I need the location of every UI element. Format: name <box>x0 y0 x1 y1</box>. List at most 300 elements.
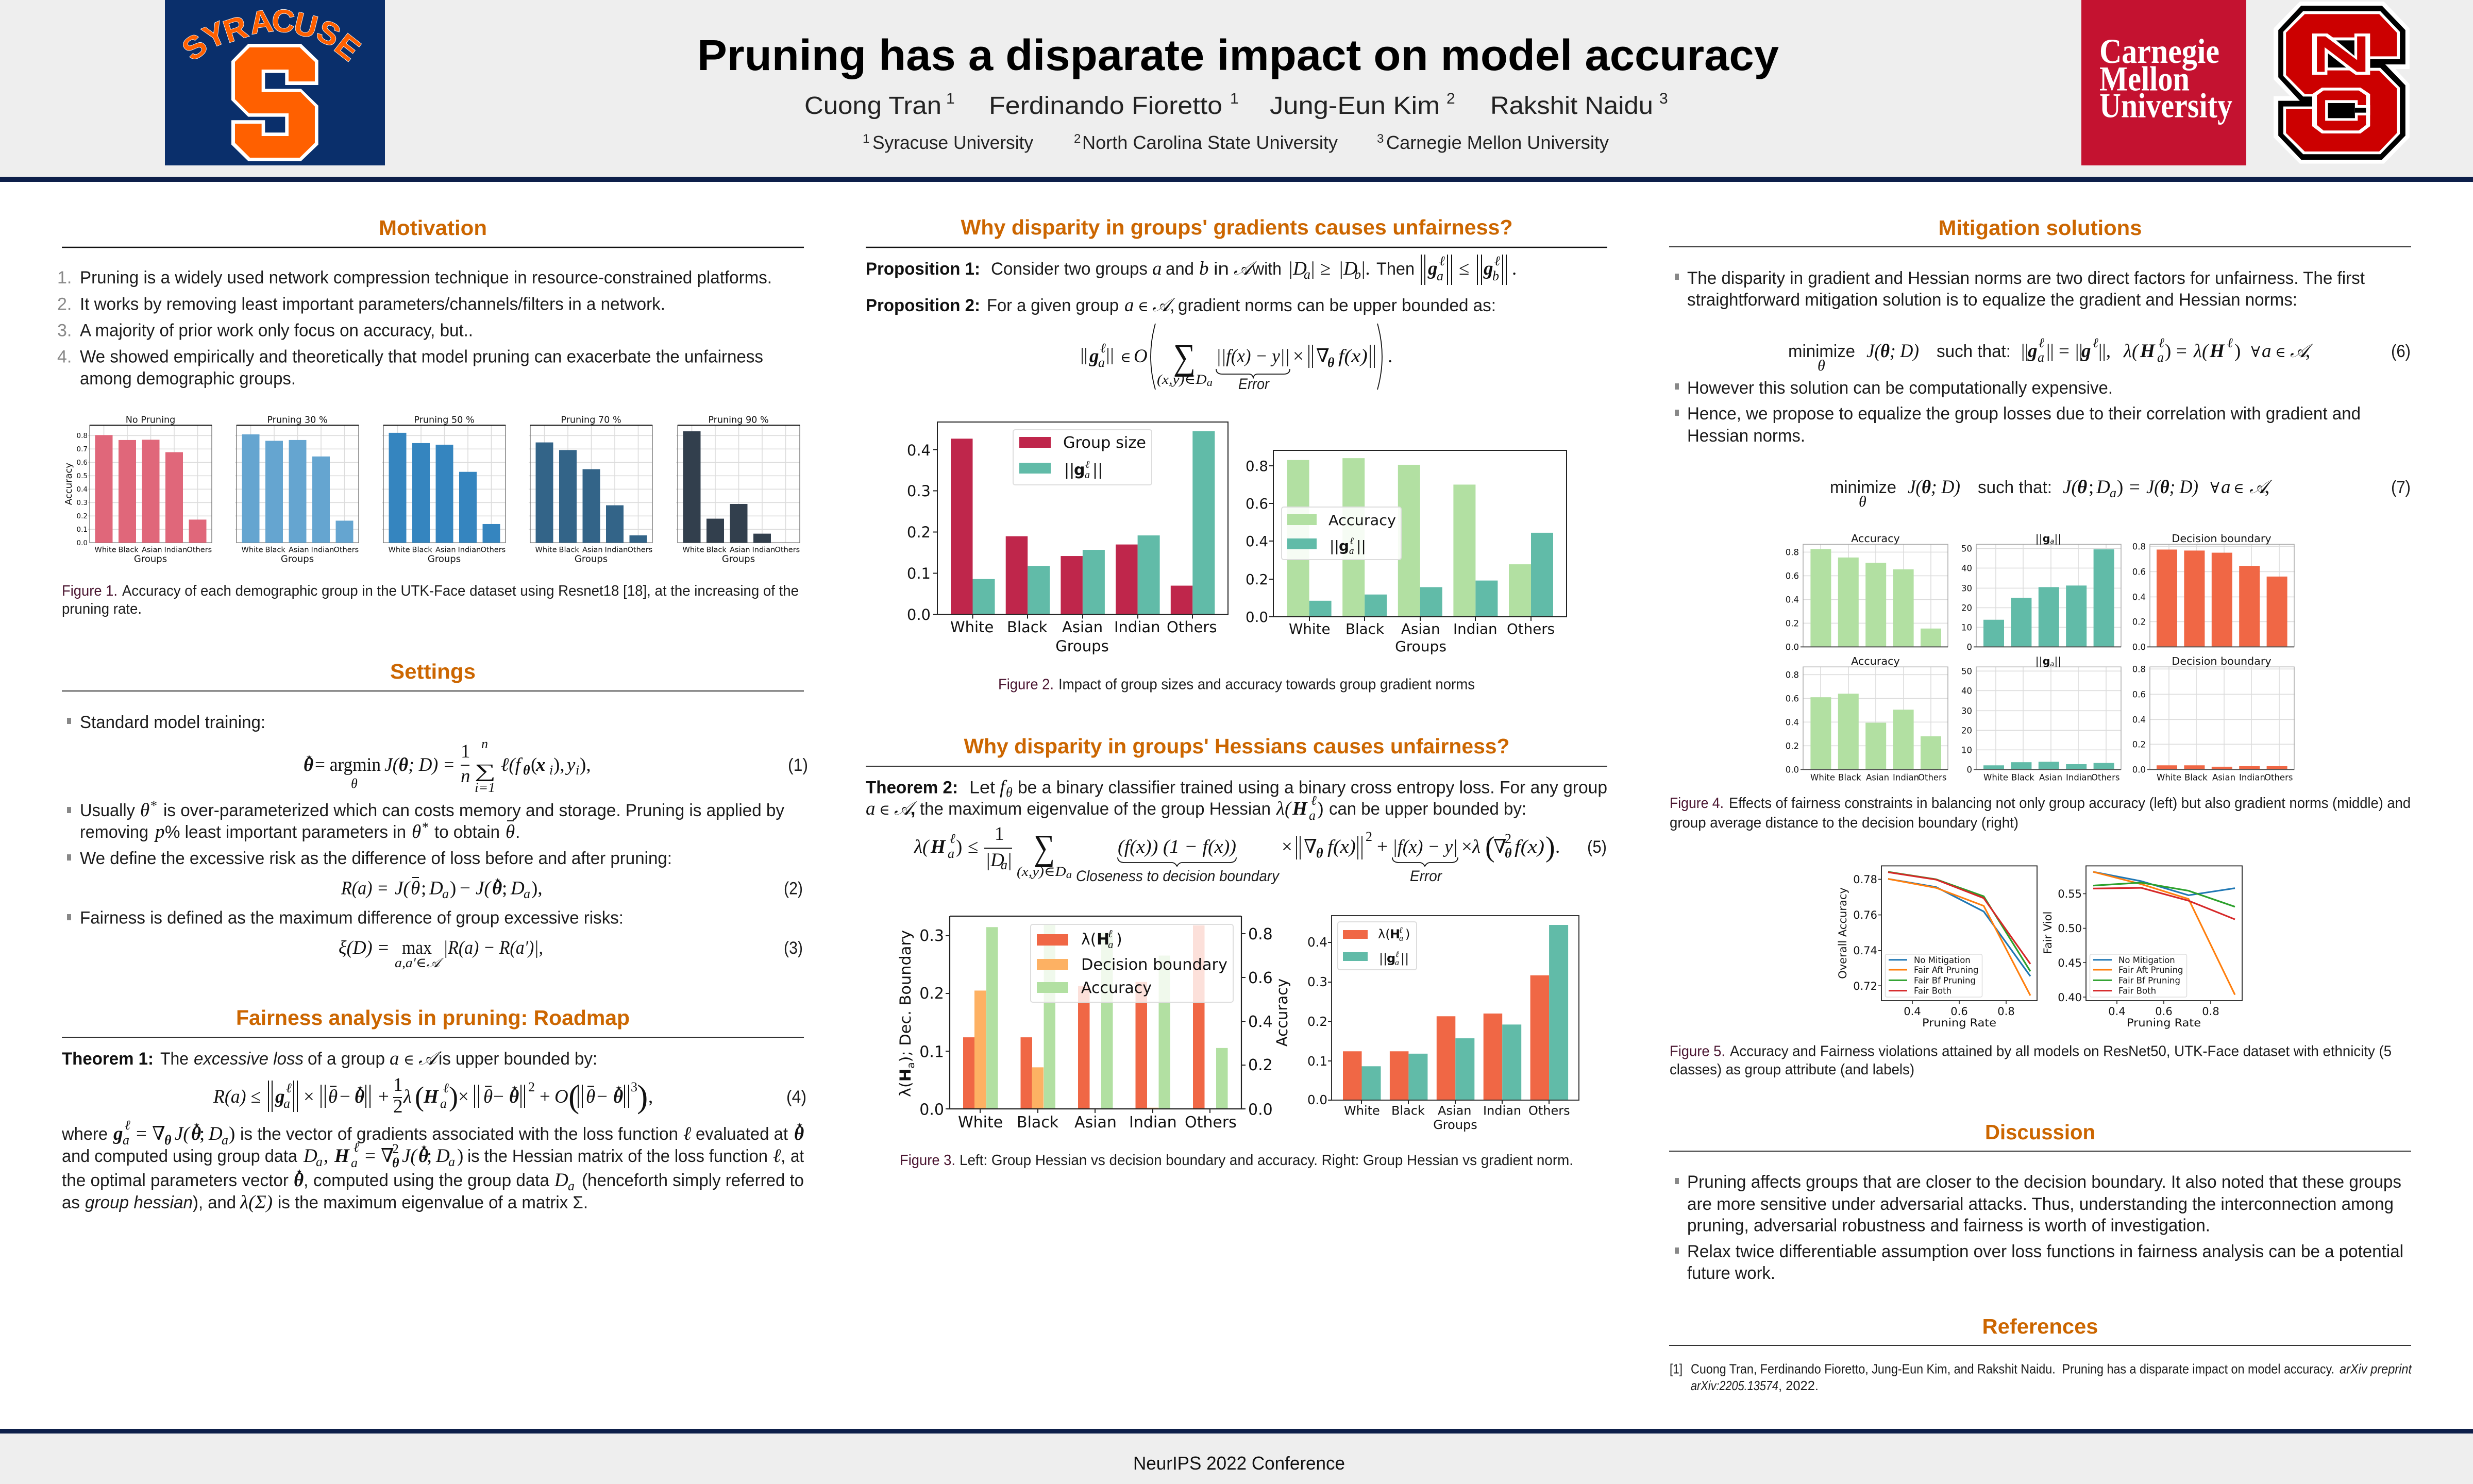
legend: || <box>1330 537 1339 554</box>
bar panel: pruning 70: Others <box>628 546 652 554</box>
theorem 2 statement: Theorem 2: <box>866 778 958 798</box>
equation 7: ∈ <box>2233 481 2244 497</box>
affiliations <box>863 132 1609 153</box>
bar panel: no pruning: Black <box>119 546 139 554</box>
theorem 1 explanation: evaluated at <box>696 1124 788 1144</box>
chart: accuracy vs gradient norm: Others <box>1507 620 1555 637</box>
motivation list <box>57 268 772 389</box>
mitigation bullets: straightforward mitigation solution is to equalize the gradient and Hessian norms: <box>1687 290 2297 310</box>
equation 4: − <box>597 1086 608 1107</box>
chart: accuracy vs pruning rate: Pruning Rate <box>1922 1017 1996 1029</box>
equation 1: i <box>576 763 579 778</box>
legend: Fair Bf Pruning <box>2118 976 2180 985</box>
panel: left column <box>57 216 808 1213</box>
legend: ℓ <box>1085 459 1090 470</box>
equation 5: × <box>1282 836 1292 857</box>
equation 6: g <box>2081 341 2091 362</box>
mitigation bullets: Hessian norms. <box>1687 426 1805 446</box>
settings bullets: removing <box>80 822 148 842</box>
chart: group size vs gradient norm: 0.4 <box>907 442 931 459</box>
equation 7: J(θ; D) <box>1908 477 1960 498</box>
theorem 1 explanation: D <box>435 1145 450 1167</box>
equation 1: n <box>461 766 470 787</box>
settings bullets: * <box>150 798 157 813</box>
equation 4: ( <box>568 1078 579 1115</box>
row 2 accuracy: White <box>1810 772 1835 782</box>
legend: || <box>1356 537 1366 554</box>
theorem 1 explanation: is the maximum eigenvalue of a matrix Σ. <box>278 1193 588 1212</box>
equation 1: J(θ; D) = <box>384 754 455 775</box>
chart: accuracy vs gradient norm <box>1246 450 1567 655</box>
proposition 1: | <box>1311 258 1315 279</box>
equation 4: θ <box>483 1086 493 1107</box>
theorem 1 explanation: as <box>62 1193 80 1212</box>
equation 2: D <box>429 878 443 899</box>
theorem 1 explanation: is the vector of gradients associated with the loss function <box>240 1124 678 1144</box>
equation 5: + <box>1377 836 1388 857</box>
discussion bullets: Relax twice differentiable assumption over loss functions in fairness analysis can be a potential <box>1687 1242 2403 1261</box>
equation 6: ℓ <box>2227 335 2233 350</box>
equation 2: ; <box>502 878 507 899</box>
equation 1: ), <box>553 754 565 775</box>
chart: figure 4 small multiples <box>1786 532 2295 782</box>
equation 6: 𝒜 <box>2290 341 2313 362</box>
equation 5: (5) <box>1587 837 1607 857</box>
caption: figure 5: classes) as group attribute (and labels) <box>1670 1061 1914 1078</box>
equation: gradient bound: a <box>1098 355 1105 370</box>
equation 5: | <box>1008 850 1012 871</box>
equation 6: || <box>2046 341 2054 362</box>
bar panel: pruning 70: Groups <box>575 553 608 564</box>
row 1 decision boundary: Decision boundary <box>2172 532 2272 545</box>
conference name: NeurIPS 2022 Conference <box>1133 1453 1345 1474</box>
legend: No Mitigation <box>2118 955 2175 965</box>
theorem 1 statement: 𝒜 <box>418 1048 442 1069</box>
equation 4: × <box>304 1086 314 1107</box>
bar panel: pruning 30: Groups <box>281 553 314 564</box>
settings bullets: * <box>422 820 429 835</box>
equation 2: R(a) = <box>341 878 389 899</box>
chart: accuracy vs gradient norm: Groups <box>1395 638 1446 655</box>
equation 3: max <box>402 937 432 958</box>
equation 4: O <box>554 1086 568 1107</box>
legend: ) <box>1405 927 1410 941</box>
proposition 1: b <box>1199 258 1209 279</box>
equation 6: J(θ; D) <box>1866 341 1919 362</box>
chart: accuracy vs pruning rate: 0.6 <box>1950 1005 1968 1018</box>
equation 4: ★ <box>512 1085 518 1092</box>
proposition 1 <box>866 254 1517 285</box>
theorem 1 explanation: = <box>136 1123 147 1144</box>
bar panel: pruning 90: Groups <box>722 553 755 564</box>
equation 5: ∇ <box>1304 836 1317 857</box>
chart: group Hessian vs decision boundary and accuracy: 0.4 <box>1248 1013 1273 1031</box>
legend <box>1013 430 1152 485</box>
equation 7: J(θ; D) <box>2146 477 2198 498</box>
legend: λ( <box>1378 927 1390 941</box>
chart: accuracy vs gradient norm: Indian <box>1453 620 1498 637</box>
row 2 decision boundary: Indian <box>2239 772 2265 782</box>
theorem 1 explanation: θ <box>794 1123 804 1144</box>
equation 6: λ( <box>2123 341 2140 362</box>
caption: figure 4: Effects of fairness constraints in balancing not only group accuracy (left) but also gradient norms (middle) and <box>1729 795 2411 812</box>
theorem 1 explanation: a <box>351 1155 358 1170</box>
settings bullets: θ <box>412 821 421 842</box>
discussion bullets: are more sensitive under adversarial attacks. Thus, understanding the interconnection among <box>1687 1194 2394 1214</box>
equation 6: a <box>2262 341 2272 362</box>
bar panel: pruning 90: Others <box>775 546 800 554</box>
caption: figure 5: Accuracy and Fairness violations attained by all models on ResNet50, UTK-Face dataset with ethnicity (5 <box>1730 1043 2392 1059</box>
motivation list: A majority of prior work only focus on accuracy, but.. <box>80 321 473 340</box>
equation 2: ; <box>421 878 426 899</box>
equation 3: ξ(D) = <box>339 937 390 958</box>
chart: group Hessian vs decision boundary and accuracy: Black <box>1017 1114 1059 1132</box>
theorem 1 explanation: ; <box>199 1123 205 1144</box>
caption: figure 1: Figure 1. <box>62 583 117 599</box>
equation 2 <box>341 877 803 901</box>
settings bullets: p <box>154 821 165 842</box>
proposition 1: ℓ <box>1439 254 1445 268</box>
equation 5: λ <box>1472 836 1481 857</box>
equation 7: = <box>2129 477 2140 498</box>
theorem 2 statement: H <box>1292 798 1308 819</box>
y tick labels: 0.2 <box>77 512 88 520</box>
equation: gradient bound: f(x) <box>1338 346 1368 367</box>
chart: accuracy vs pruning rate: Overall Accuracy <box>1837 887 1849 979</box>
theorem 1 explanation: ℓ <box>354 1140 359 1155</box>
row 2 accuracy: Accuracy <box>1851 655 1900 667</box>
chart: group size vs gradient norm <box>907 422 1228 655</box>
affiliations: 3 <box>1377 132 1384 146</box>
equation: gradient bound: ∈ <box>1120 350 1131 366</box>
equation 4: 3 <box>631 1080 637 1094</box>
settings bullets: θ <box>506 821 515 842</box>
row 1 gradient norm: ||g <box>2035 532 2050 545</box>
settings bullets: Standard model training: <box>80 713 265 732</box>
legend: || <box>1401 951 1409 966</box>
header band <box>0 0 2473 182</box>
caption: figure 2: Impact of group sizes and accuracy towards group gradient norms <box>1058 676 1475 693</box>
theorem 1 explanation: ∇ <box>381 1145 394 1167</box>
legend: ℓ <box>1399 926 1403 935</box>
motivation list: 4. <box>57 347 72 367</box>
row 2 accuracy: 0.6 <box>1786 694 1799 703</box>
motivation list: 2. <box>57 295 72 314</box>
authors: Ferdinando Fioretto <box>989 92 1222 120</box>
motivation list: 1. <box>57 268 72 288</box>
theorem 1 explanation: a <box>316 1154 323 1169</box>
equation 4: θ <box>328 1086 338 1107</box>
row 1 accuracy: Accuracy <box>1851 532 1900 545</box>
proposition 1: a <box>1152 258 1162 279</box>
proposition 1: . <box>1512 258 1517 279</box>
row 2 gradient norm: || <box>2054 655 2061 668</box>
proposition 1: and <box>1166 259 1194 279</box>
proposition 1: g <box>1483 258 1493 279</box>
chart: group Hessian vs gradient norm: Asian <box>1438 1104 1472 1118</box>
row 2 accuracy <box>1786 655 1948 782</box>
chart: accuracy vs pruning rate: 0.72 <box>1853 980 1877 992</box>
row 1 accuracy: 0.2 <box>1786 618 1799 628</box>
y tick labels: 0.0 <box>77 539 88 547</box>
row 2 gradient norm: Asian <box>2039 772 2062 782</box>
equation 6: a <box>2038 350 2044 365</box>
row 1 accuracy: 0.4 <box>1786 595 1799 604</box>
equation 4: λ <box>403 1086 412 1107</box>
y tick labels: 0.5 <box>77 472 88 480</box>
bar panel: pruning 70: Asian <box>582 546 603 554</box>
bar panel: no pruning: Groups <box>134 553 167 564</box>
equation 4: H <box>423 1086 439 1107</box>
row 2 gradient norm: a <box>2050 661 2054 668</box>
equation 4: 2 <box>393 1096 403 1117</box>
row 2 accuracy: 0.0 <box>1786 765 1799 774</box>
equation 4 <box>213 1074 806 1117</box>
row 2 decision boundary: Others <box>2264 772 2293 782</box>
bar panel: pruning 50: Pruning 50 % <box>414 415 475 425</box>
affiliations: 1 <box>863 132 869 146</box>
theorem 1 explanation: at <box>790 1146 804 1166</box>
equation 7: ) <box>2117 477 2123 498</box>
theorem 1 statement: ∈ <box>403 1052 414 1068</box>
chart: group Hessian vs decision boundary and accuracy: 0.2 <box>919 985 944 1003</box>
legend: Fair Both <box>1914 986 1952 996</box>
reference entry: arXiv preprint <box>2340 1361 2413 1377</box>
row 1 gradient norm: 10 <box>1961 622 1972 632</box>
theorem 2 statement: 𝒜 <box>894 798 917 819</box>
chart: group size vs gradient norm: 0.1 <box>907 565 931 582</box>
motivation list: It works by removing least important parameters/channels/filters in a network. <box>80 295 665 314</box>
bar panel: pruning 90: White <box>682 546 704 554</box>
theorem 2 statement: θ <box>1006 785 1013 800</box>
theorem 2 statement: be a binary classifier trained using a binary cross entropy loss. For any group <box>1018 778 1607 798</box>
equation 2: (2) <box>784 879 803 899</box>
mitigation bullets <box>1675 268 2365 446</box>
row 2 decision boundary: 0.4 <box>2132 715 2146 724</box>
row 2 gradient norm: Indian <box>2066 772 2092 782</box>
proposition 1: |. <box>1361 258 1370 279</box>
bar panel: pruning 30: White <box>241 546 263 554</box>
proposition 2: gradient norms can be upper bounded as: <box>1178 296 1496 315</box>
row 1 gradient norm: a <box>2050 538 2054 546</box>
equation 2: − <box>460 878 470 899</box>
panel: middle column <box>866 215 1607 1169</box>
bar panel: no pruning: Asian <box>142 546 162 554</box>
settings bullets: % least important parameters in <box>165 822 406 842</box>
theorem 1 statement: excessive loss <box>194 1049 304 1069</box>
row 2 gradient norm: 50 <box>1961 666 1972 676</box>
proposition 1: Then <box>1376 259 1415 279</box>
settings bullets <box>67 713 784 928</box>
equation 2: ), <box>531 878 543 899</box>
bar panel: pruning 50: Others <box>480 546 506 554</box>
equation 5: × <box>1461 836 1472 857</box>
equation 4: ( <box>415 1081 424 1112</box>
equation 1: (1) <box>788 755 808 775</box>
bar panel: pruning 70: Indian <box>605 546 628 554</box>
equation: gradient bound: a <box>1207 377 1213 389</box>
authors: 1 <box>946 90 955 107</box>
legend: Fair Both <box>2118 986 2156 996</box>
chart: fair violation vs pruning rate: 0.50 <box>2058 922 2082 935</box>
equation 7: J( <box>2063 477 2079 498</box>
chart: group Hessian vs gradient norm: 0.0 <box>1307 1092 1327 1107</box>
chart: group Hessian vs decision boundary and accuracy: 0.8 <box>1248 925 1273 943</box>
chart: group size vs gradient norm: Black <box>1007 618 1048 636</box>
proposition 2: a <box>1124 295 1134 316</box>
chart: group Hessian vs decision boundary and accuracy: Indian <box>1129 1114 1177 1132</box>
equation 7: D <box>2096 477 2110 498</box>
bar panel: pruning 90 <box>676 415 800 564</box>
logo: Syracuse: Y <box>198 15 231 56</box>
equation 4: 2 <box>528 1080 535 1094</box>
row 2 decision boundary: Asian <box>2212 772 2235 782</box>
equation 5: ≤ <box>968 836 978 857</box>
chart: group Hessian vs decision boundary and accuracy: White <box>958 1114 1003 1132</box>
theorem 1 explanation: H <box>334 1145 350 1167</box>
equation 6: = <box>2176 341 2187 362</box>
bar panel: pruning 50: Groups <box>428 553 461 564</box>
equation 6: H <box>2140 341 2156 362</box>
proposition 1: Consider two groups <box>991 259 1148 279</box>
bar panel: pruning 30: Black <box>265 546 285 554</box>
caption: figure 3: Left: Group Hessian vs decision boundary and accuracy. Right: Group Hessian vs gradient norm. <box>960 1152 1573 1169</box>
equation: gradient bound: O <box>1134 346 1148 367</box>
equation 6: H <box>2209 341 2225 362</box>
row 2 gradient norm: 0 <box>1966 765 1972 774</box>
chart: accuracy vs pruning rate: 0.4 <box>1904 1005 1921 1018</box>
theorem 1 explanation: and computed using group data <box>62 1146 297 1166</box>
caption: figure 2: Figure 2. <box>998 676 1054 693</box>
row 2 decision boundary: Decision boundary <box>2172 655 2272 667</box>
chart: fair violation vs pruning rate: 0.55 <box>2058 888 2082 900</box>
chart: group size vs gradient norm: Asian <box>1062 618 1103 636</box>
chart: group Hessian vs gradient norm: 0.4 <box>1307 935 1327 950</box>
equation: gradient bound: (x,y)∈D <box>1157 372 1201 387</box>
equation 5: λ( <box>914 836 930 857</box>
equation 6: λ( <box>2193 341 2210 362</box>
row 1 decision boundary: 0.4 <box>2132 592 2146 602</box>
equation 7: θ <box>2077 477 2087 498</box>
row 1 gradient norm <box>1961 532 2121 652</box>
row 2 gradient norm: White <box>1983 772 2008 782</box>
equation: gradient bound: ∑ <box>1173 338 1196 377</box>
equation 6: g <box>2027 341 2038 362</box>
equation 4: ) <box>637 1078 648 1115</box>
legend: No Mitigation <box>1914 955 1971 965</box>
theorem 1 explanation: ℓ <box>683 1123 692 1144</box>
legend: g <box>1074 461 1085 479</box>
equation 1: ), <box>580 754 591 775</box>
bar panel: no pruning <box>88 415 212 564</box>
bar panel: pruning 50 <box>382 415 506 564</box>
equation 4: 1 <box>393 1074 403 1095</box>
legend <box>2090 954 2187 997</box>
chart: group Hessian vs gradient norm: 0.1 <box>1307 1054 1327 1069</box>
bar panel: pruning 70: White <box>535 546 557 554</box>
chart: accuracy vs gradient norm: 0.2 <box>1246 571 1268 588</box>
legend: λ( <box>1081 931 1096 949</box>
theorem 2 statement: can be upper bounded by: <box>1329 799 1526 819</box>
caption: figure 3: Figure 3. <box>900 1152 955 1169</box>
equation 1: n <box>481 736 488 751</box>
proposition 1: b <box>1354 267 1361 282</box>
equation 5: f(x) <box>1327 836 1356 857</box>
authors <box>804 90 1668 120</box>
theorem 2 statement: λ( <box>1276 798 1292 819</box>
chart: group Hessian vs decision boundary and accuracy: 0.0 <box>1248 1101 1273 1119</box>
logo: Syracuse <box>165 0 385 165</box>
motivation list: We showed empirically and theoretically that model pruning can exacerbate the unfairness <box>80 347 763 367</box>
legend: Group size <box>1063 434 1146 452</box>
equation 6: θ <box>1818 357 1825 374</box>
y tick labels: 0.1 <box>77 526 88 534</box>
proposition 1: Proposition 1: <box>866 259 980 279</box>
proposition 1: ≤ <box>1459 258 1469 279</box>
footer band <box>0 1429 2473 1484</box>
chart: fair violation vs pruning rate: Pruning Rate <box>2127 1017 2201 1029</box>
chart: group Hessian vs decision boundary and accuracy: 0.3 <box>919 927 944 945</box>
theorem 2 statement: a <box>866 798 875 819</box>
authors: Jung-Eun Kim <box>1270 92 1440 120</box>
equation 4: θ <box>586 1086 595 1107</box>
theorem 1 explanation: θ <box>191 1123 201 1144</box>
chart: group size vs gradient norm: White <box>950 618 994 636</box>
logo: Syracuse: R <box>219 9 252 50</box>
legend: ) <box>1116 931 1122 949</box>
equation 4: a <box>283 1096 290 1111</box>
equation 6: || <box>2021 341 2029 362</box>
logo: Carnegie Mellon: Mellon <box>2099 59 2190 98</box>
equation 5: (f(x)) (1 − f(x)) <box>1118 836 1236 857</box>
proposition 2 <box>866 295 1496 316</box>
motivation list: among demographic groups. <box>80 369 296 389</box>
row 2 gradient norm: 40 <box>1961 686 1972 696</box>
chart: accuracy vs gradient norm: Black <box>1345 620 1384 637</box>
equation 1: ( <box>531 754 537 775</box>
theorem 2 statement: f <box>1000 777 1007 798</box>
logo: NC State <box>2274 2 2410 164</box>
chart: fair violation vs pruning rate: 0.8 <box>2202 1005 2219 1018</box>
equation 7: (7) <box>2391 478 2411 497</box>
theorem 1 explanation: θ <box>294 1170 304 1191</box>
theorem 1 explanation: J( <box>402 1145 418 1167</box>
equation 5: ∑ <box>1034 828 1055 868</box>
theorem 2 statement: ℓ <box>1311 793 1317 808</box>
equation 1: θ <box>351 776 358 791</box>
chart: figure 1 accuracy by pruning level <box>63 415 800 564</box>
logo: Syracuse: S <box>176 27 214 68</box>
chart: group Hessian vs decision boundary and accuracy: 0.2 <box>1248 1056 1273 1074</box>
theorem 2 statement: ) <box>1317 798 1323 819</box>
equation 4: ℓ <box>443 1081 449 1095</box>
chart: accuracy vs gradient norm: 0.4 <box>1246 533 1268 550</box>
equation 2: θ <box>492 878 502 899</box>
logo: Carnegie Mellon: Carnegie <box>2099 31 2219 71</box>
proposition 1: a <box>1437 268 1443 283</box>
y tick labels: 0.3 <box>77 499 88 507</box>
row 2 accuracy: Others <box>1918 772 1946 782</box>
equation 5: θ <box>1316 846 1323 861</box>
chart: accuracy vs pruning rate: 0.76 <box>1853 909 1877 921</box>
equation 5: a <box>948 846 954 861</box>
logo: Syracuse: C <box>271 3 296 40</box>
legend: Accuracy <box>1081 979 1152 997</box>
chart: group Hessian vs gradient norm: 0.3 <box>1307 974 1327 989</box>
theorem 1 explanation: ℓ <box>125 1118 130 1133</box>
legend: H <box>1097 931 1109 949</box>
row 1 decision boundary: 0.6 <box>2132 567 2146 577</box>
